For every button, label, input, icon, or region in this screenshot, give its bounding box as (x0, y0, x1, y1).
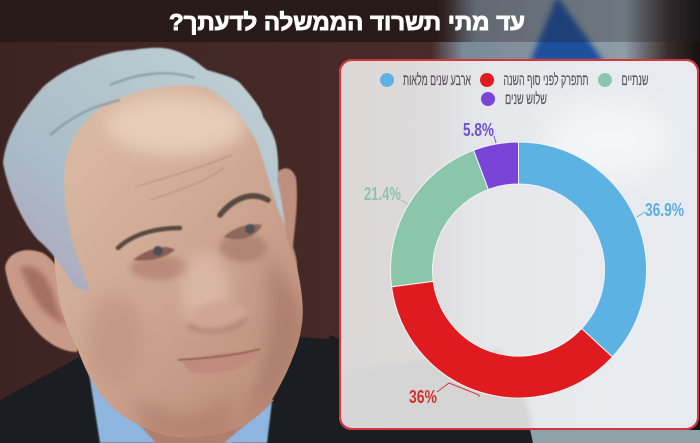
nose (188, 301, 248, 331)
title: עד מתי תשרוד הממשלה לדעתך? (169, 9, 525, 35)
neck (138, 400, 274, 443)
legend item: two years: שנתיים (622, 72, 648, 89)
face (53, 84, 303, 437)
hair (3, 48, 285, 291)
label: 36.9% (637, 200, 684, 220)
label: 5.8%: 5.8% (463, 120, 494, 140)
legend item: collapse before year end (480, 71, 588, 89)
legend (380, 71, 648, 108)
left ear (5, 250, 80, 352)
label: 21.4%: 21.4% (364, 184, 401, 204)
shirt collar (88, 374, 273, 443)
donut chart (390, 142, 647, 398)
suit jacket (0, 337, 345, 443)
legend item: four full years: ארבע שנים מלאות (403, 71, 471, 89)
mouth (178, 349, 260, 374)
legend item: three years: שלוש שנים (505, 90, 547, 108)
right ear (277, 168, 297, 272)
portrait photo illustration (0, 48, 345, 443)
face shading (87, 95, 304, 440)
slice: 5.8% three years (474, 142, 518, 190)
forehead wrinkles (135, 155, 232, 200)
legend item: three years (481, 90, 547, 108)
title bar (0, 0, 700, 42)
label: 36.9%: 36.9% (645, 200, 684, 220)
legend item: four full years (380, 71, 471, 89)
label: 36% (409, 383, 479, 407)
eyebrows (118, 196, 268, 248)
slice: 36% collapse (392, 281, 612, 398)
legend item: collapse before year end: תתפרק לפני סוף השנה (504, 71, 588, 89)
panel: survey donut card (339, 59, 699, 430)
hair streaks (50, 73, 195, 135)
legend item: two years (598, 72, 648, 89)
slice: 21.4% two years (390, 150, 488, 287)
label: 36%: 36% (409, 387, 437, 407)
eyes (133, 224, 262, 261)
slice: 36.9% four full years (518, 142, 647, 357)
